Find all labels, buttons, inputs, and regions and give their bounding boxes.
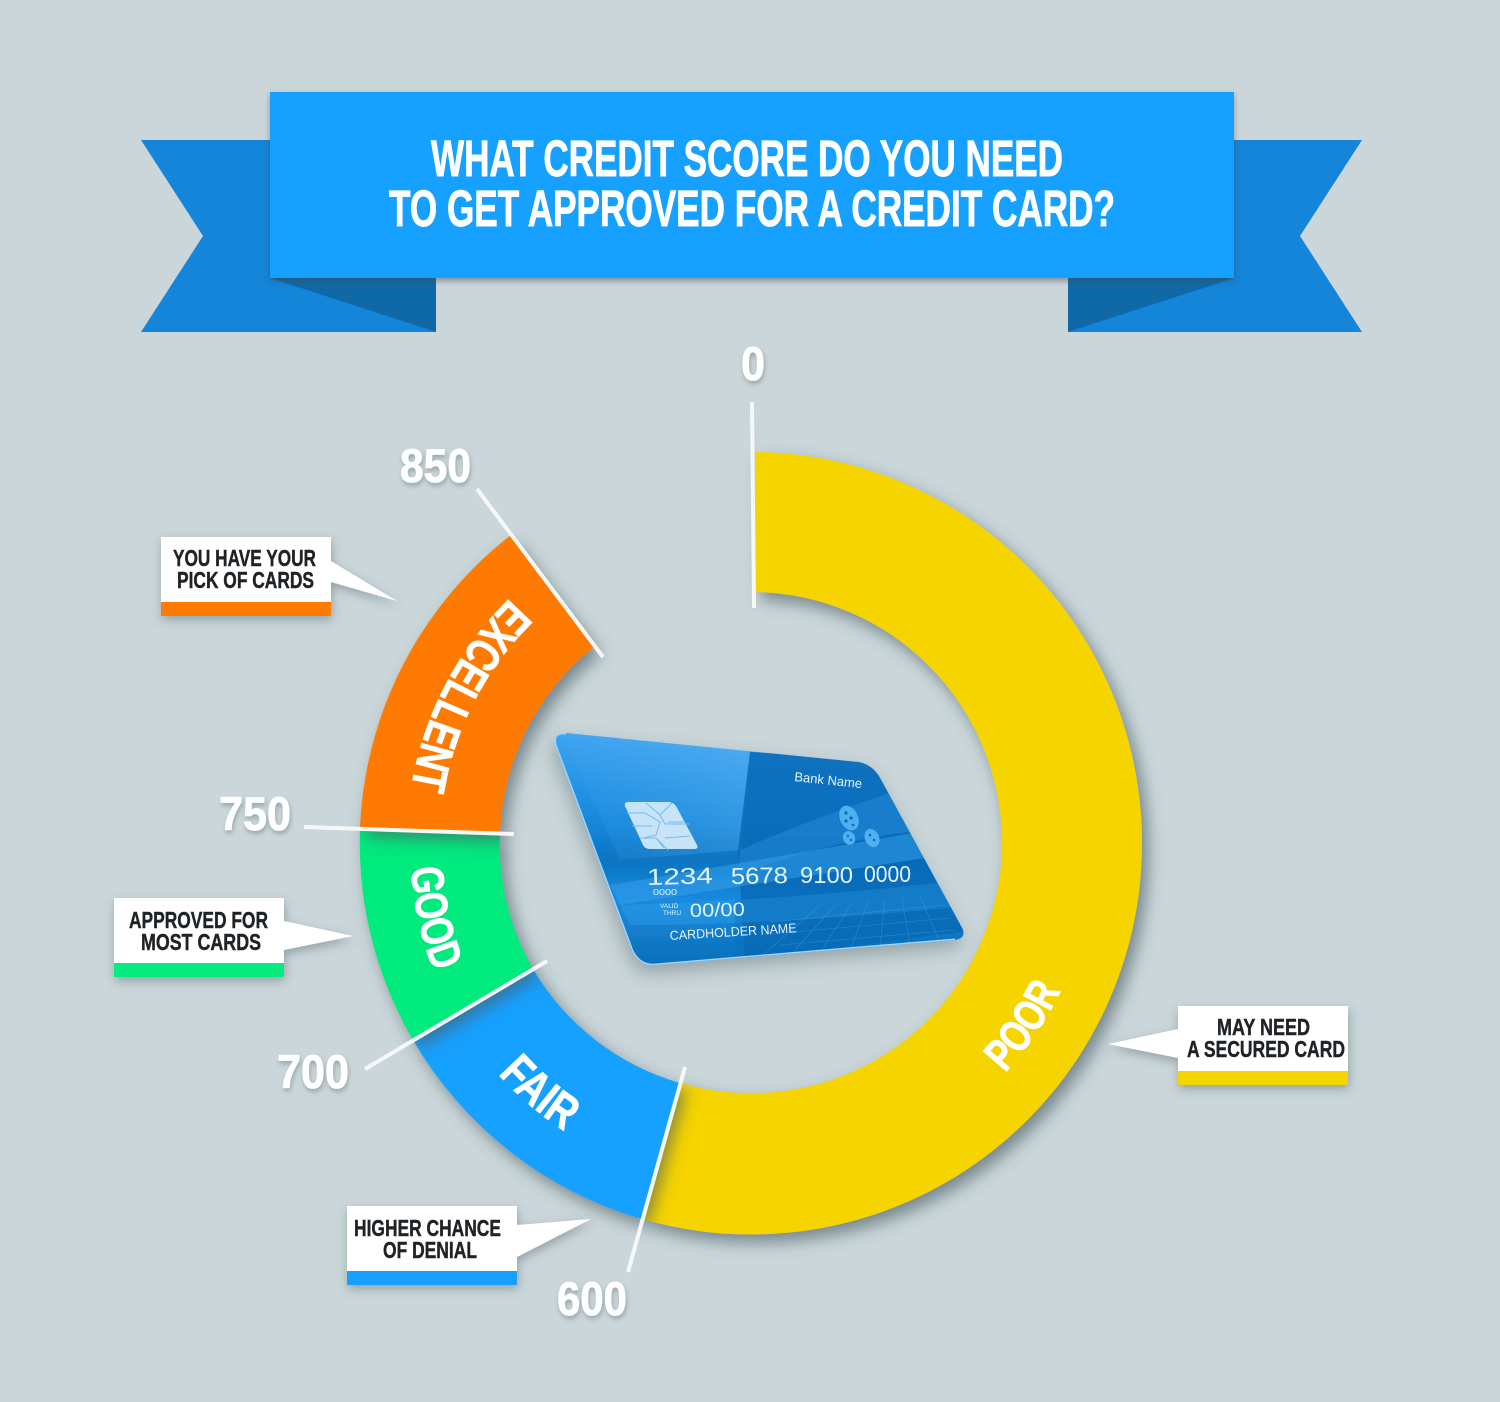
- callout: poor: MAY NEED: [1217, 1014, 1310, 1040]
- bank logo: [835, 802, 882, 850]
- score 0: 0: [741, 337, 765, 390]
- callout: poor: A SECURED CARD: [1187, 1036, 1345, 1062]
- segment: fair: [413, 969, 680, 1219]
- callout: excellent: PICK OF CARDS: [177, 567, 314, 593]
- title banner: [141, 92, 1362, 332]
- callout: good: APPROVED FOR: [129, 907, 268, 933]
- score tick lines: [304, 402, 754, 1272]
- label: fair: FAIR: [499, 1052, 579, 1132]
- segment: excellent: [360, 535, 595, 834]
- ribbon left fold: [270, 278, 436, 332]
- segment: good: [360, 829, 533, 1040]
- card number: [646, 861, 911, 890]
- EMV chip: [625, 802, 698, 850]
- label: excellent: EXCELLENT: [412, 599, 532, 795]
- valid thru label: [660, 903, 681, 917]
- card number: 5678: [731, 862, 788, 889]
- score numbers: [219, 337, 765, 1325]
- callout: excellent: [161, 537, 397, 616]
- score 700: 700: [277, 1045, 349, 1098]
- bank name: Bank Name: [794, 769, 863, 791]
- score 750: 750: [219, 787, 291, 840]
- title second line: TO GET APPROVED FOR A CREDIT CARD?: [389, 180, 1115, 237]
- score 850: 850: [400, 439, 471, 492]
- expiry: 00/00: [690, 900, 745, 922]
- label: poor: POOR: [982, 980, 1062, 1072]
- callout: fair: OF DENIAL: [383, 1237, 477, 1263]
- ribbon right fold: [1068, 278, 1234, 332]
- card number: 0000: [864, 861, 911, 887]
- callout: good: [114, 898, 353, 977]
- callout: poor: [1108, 1006, 1348, 1085]
- label: good: GOOD: [411, 867, 460, 968]
- title: WHAT CREDIT SCORE DO YOU NEED: [431, 130, 1063, 187]
- valid thru label: THRU: [663, 910, 681, 917]
- ribbon main panel: [270, 92, 1234, 278]
- valid thru label: VALID: [660, 903, 679, 910]
- segment: poor: [642, 452, 1142, 1235]
- callout: fair: [347, 1206, 591, 1285]
- score 600: 600: [557, 1272, 627, 1325]
- card artwork: [554, 730, 975, 965]
- donut chart: credit score ranges: [354, 450, 1158, 1252]
- card number: 1234: [646, 862, 713, 890]
- callout: good: MOST CARDS: [141, 929, 261, 955]
- ribbon right tail: [1068, 140, 1362, 332]
- callout: fair: HIGHER CHANCE: [354, 1215, 501, 1241]
- ribbon left tail: [141, 140, 436, 332]
- card body: [554, 733, 963, 965]
- credit card illustration: [554, 730, 975, 965]
- cardholder name: CARDHOLDER NAME: [669, 920, 797, 943]
- callout: excellent: YOU HAVE YOUR: [173, 545, 316, 571]
- card small digits: 0000: [653, 888, 678, 897]
- card number: 9100: [800, 862, 853, 888]
